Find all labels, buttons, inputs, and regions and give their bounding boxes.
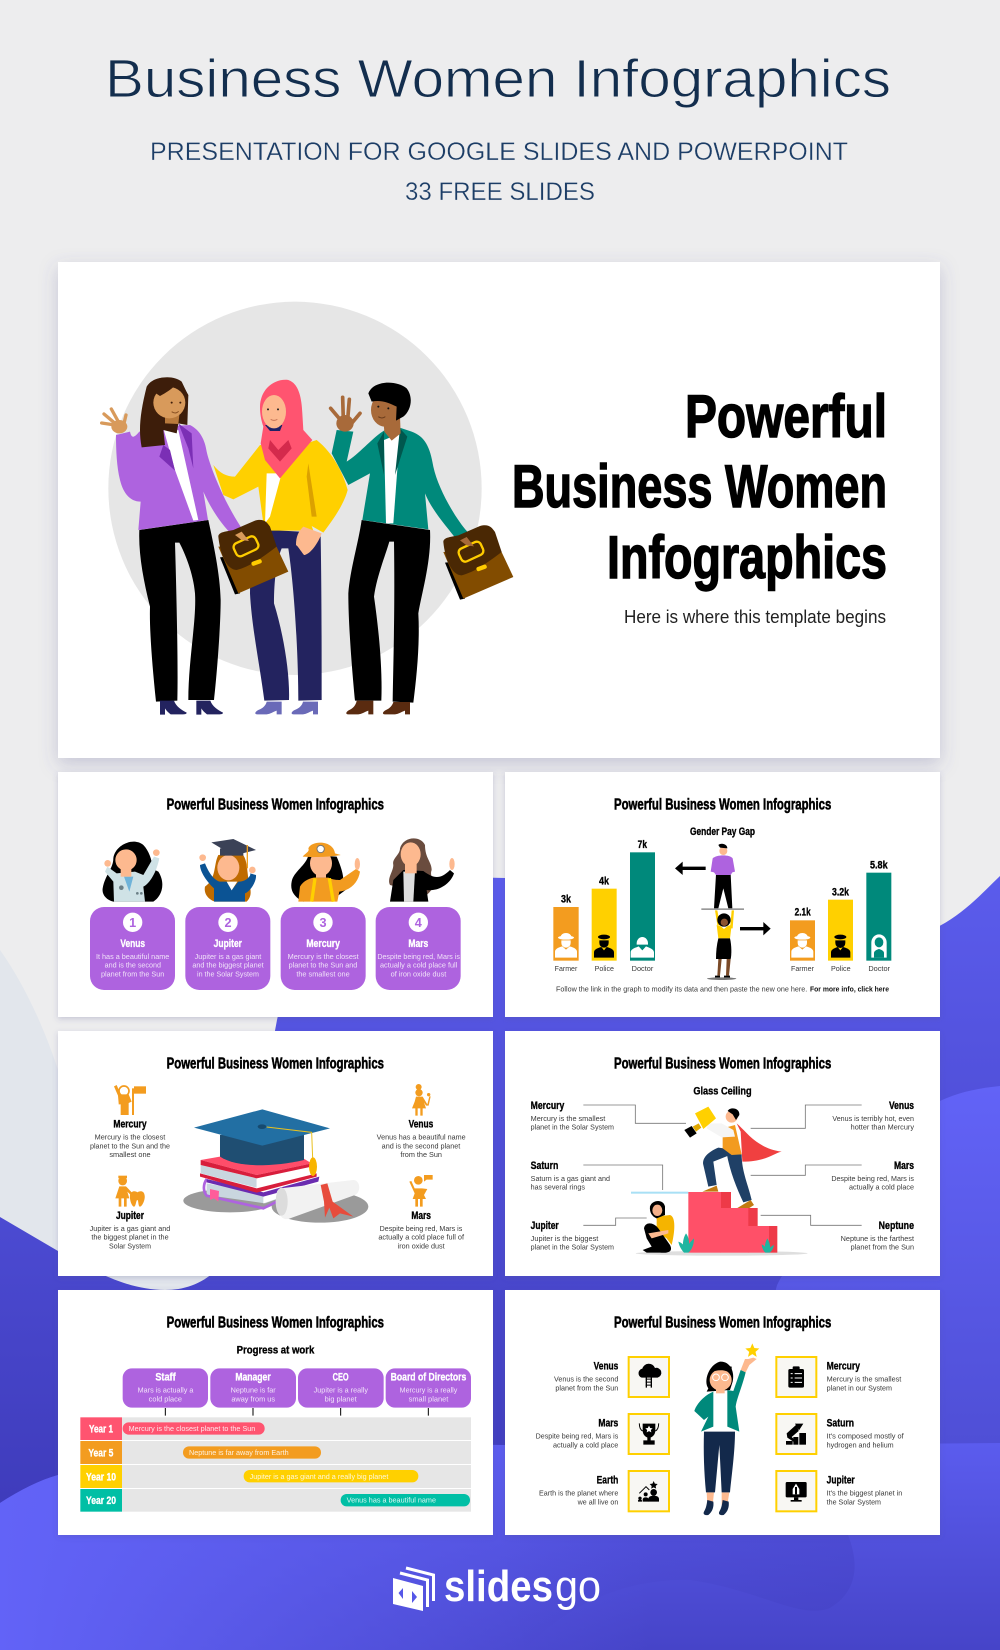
text: Jupiter	[90, 1210, 170, 1250]
text: Venus: Venus has a beautiful name	[377, 1135, 466, 1142]
card 1 Venus: and is the second	[105, 963, 161, 970]
bar chart: left (men): Police	[595, 966, 614, 973]
column: CEO: Jupiter is a really	[314, 1388, 369, 1395]
icon: astronaut woman with flag	[114, 1085, 146, 1115]
item: Jupiter: Jupiter	[827, 1474, 855, 1486]
bar chart: left (men): 3k	[561, 893, 572, 905]
icon: female farmer	[791, 933, 813, 958]
column: Staff: cold place	[149, 1396, 182, 1403]
bar chart: left (men)	[553, 839, 655, 973]
subheading: Progress at work	[237, 1344, 315, 1356]
column: Manager: Neptune is far	[231, 1388, 276, 1395]
column: Manager: away from us	[231, 1396, 276, 1403]
item: Mercury: Mercury	[827, 1360, 861, 1372]
panel: slide 2 gender pay gap	[505, 772, 940, 1017]
column: Staff	[123, 1368, 208, 1408]
text: Jupiter: planet in the Solar System	[531, 1245, 614, 1252]
text: Jupiter: Jupiter	[116, 1210, 145, 1222]
icon: monitor	[786, 1482, 807, 1502]
card 3 Mercury: Mercury	[306, 938, 341, 950]
bar chart: right (women): 5.8k	[870, 859, 888, 871]
text: Venus	[377, 1119, 466, 1159]
wordmark: go	[555, 1562, 601, 1611]
column: Board of Directors: small planet	[409, 1396, 448, 1403]
item: Mercury	[776, 1357, 901, 1397]
text: Mars: iron oxide dust	[398, 1243, 445, 1250]
icon: female doctor	[871, 934, 887, 958]
text: Venus	[832, 1100, 915, 1132]
text: Mercury: planet in the Solar System	[531, 1125, 614, 1132]
column: Board of Directors: Mercury is a really	[400, 1388, 458, 1395]
slide heading: Powerful Business Women Infographics	[167, 1314, 384, 1331]
bar chart: left (men): Doctor	[632, 966, 654, 973]
connector lines	[583, 1105, 862, 1225]
row: Year 20: Venus has a beautiful name	[347, 1498, 436, 1505]
bar chart: left (men): 4k	[599, 875, 610, 887]
item: Saturn: It's composed mostly of	[827, 1434, 904, 1441]
card 3 Mercury: the smallest one	[296, 971, 350, 978]
text: Mars: actually a cold place	[849, 1185, 914, 1192]
panel: hero slide	[58, 262, 940, 758]
woman in purple jacket	[102, 377, 241, 715]
column: Manager: Manager	[235, 1371, 271, 1383]
icon: stacked pages	[393, 1568, 434, 1611]
text: Neptune: Neptune	[879, 1220, 914, 1232]
text: Mercury: Mercury	[531, 1100, 565, 1112]
item: Saturn	[776, 1414, 904, 1454]
figure: woman below	[707, 910, 736, 980]
subtitle	[150, 138, 848, 206]
icon: female police	[831, 935, 850, 958]
icon: clipboard	[788, 1366, 804, 1388]
text: Jupiter: Jupiter	[531, 1220, 559, 1232]
icon: dentist woman with tooth	[115, 1176, 145, 1207]
figure: business woman	[389, 838, 455, 902]
text: Mars	[831, 1160, 915, 1192]
column: Manager	[210, 1368, 296, 1408]
icon: hand with steps	[786, 1424, 806, 1445]
card 1 Venus: 1	[129, 916, 136, 930]
card 1 Venus: It has a beautiful name	[96, 954, 169, 961]
row: Year 5: Neptune is far away from Earth	[189, 1450, 289, 1457]
card 2 Jupiter: Jupiter	[214, 938, 243, 950]
item: Jupiter: It's the biggest planet in	[827, 1491, 902, 1498]
row: Year 5	[80, 1441, 321, 1464]
illustration: graduation cap, books and diploma	[183, 1109, 368, 1223]
icon: speaking woman	[409, 1175, 433, 1207]
column: Board of Directors	[386, 1368, 471, 1408]
text: Mercury	[90, 1119, 170, 1159]
illustration: three business women	[102, 302, 513, 715]
card 2 Jupiter: in the Solar System	[197, 971, 259, 978]
row: Year 20	[80, 1489, 470, 1512]
item: Mars: Mars	[598, 1417, 618, 1429]
item: Jupiter	[776, 1471, 902, 1511]
slide heading: Powerful Business Women Infographics	[614, 1055, 831, 1072]
row: Year 10: Jupiter is a gas giant and a really big planet	[250, 1474, 388, 1481]
column ticks	[165, 1408, 428, 1416]
item: Venus: Venus	[594, 1360, 618, 1372]
hero heading: Infographics	[607, 524, 887, 591]
column: Staff: Mars is actually a	[138, 1388, 193, 1395]
text: Mercury: Mercury is the closest	[95, 1135, 165, 1142]
card 2 Jupiter: and the biggest planet	[192, 963, 264, 970]
arrow: right	[740, 922, 771, 935]
text: Venus: hotter than Mercury	[851, 1125, 915, 1132]
panel: slide 6 icons and woman reaching star	[505, 1290, 940, 1535]
hero heading: Powerful	[685, 383, 887, 450]
card 1 Venus: planet from the Sun	[101, 971, 164, 978]
bar chart: left (men): 7k	[638, 839, 648, 851]
bar chart: right (women)	[790, 859, 891, 973]
text: Jupiter: the biggest planet in the	[91, 1235, 169, 1242]
hero heading: Business Women	[512, 453, 887, 520]
panel: slide 3 graduation	[58, 1031, 493, 1276]
bar chart: left (men): Farmer	[555, 966, 578, 973]
figure: man on top	[711, 844, 735, 908]
subheading: Glass Ceiling	[693, 1085, 752, 1097]
column: CEO	[298, 1368, 384, 1408]
item: Mars	[536, 1414, 669, 1454]
illustration: sitting woman	[643, 1201, 674, 1253]
icon: police	[594, 935, 614, 958]
woman in yellow jacket and pink hijab	[213, 380, 348, 714]
logo: slidesgo	[393, 1562, 601, 1611]
text: Venus: from the Sun	[400, 1152, 442, 1159]
footnote: For more info, click here	[810, 987, 889, 994]
card 4 Mars	[376, 907, 461, 990]
text: Neptune: planet from the Sun	[851, 1245, 914, 1252]
background blobs	[0, 876, 1000, 1650]
text: Saturn: Saturn is a gas giant and	[531, 1176, 610, 1183]
bar chart: right (women): Police	[831, 966, 851, 973]
text: Saturn: Saturn	[531, 1160, 559, 1172]
text: Venus: Venus is terribly hot, even	[832, 1116, 914, 1123]
card 4 Mars: 4	[415, 916, 422, 930]
row: Year 1: Year 1	[89, 1423, 113, 1435]
text: Jupiter: Jupiter is a gas giant and	[90, 1226, 170, 1233]
card 2 Jupiter	[185, 907, 270, 990]
item: Earth	[539, 1471, 669, 1511]
text: Mercury: planet to the Sun and the	[90, 1143, 170, 1150]
row: Year 1: Mercury is the closest planet to the Sun	[129, 1426, 255, 1433]
text: Saturn	[531, 1160, 610, 1192]
figure: doctor	[103, 842, 162, 902]
bar chart: right (women): Farmer	[791, 966, 815, 973]
card 2 Jupiter: Jupiter is a gas giant	[195, 954, 261, 961]
balance beam	[701, 908, 744, 910]
item: Mercury: Mercury is the smallest	[827, 1377, 901, 1384]
subtitle: 33 FREE SLIDES	[405, 178, 595, 206]
card 4 Mars: Mars	[408, 938, 428, 950]
slide heading: Powerful Business Women Infographics	[167, 1055, 384, 1072]
glass ceiling line	[631, 1192, 688, 1194]
card 3 Mercury: Mercury is the closest	[288, 954, 359, 961]
item: Venus	[554, 1357, 669, 1397]
card 3 Mercury: 3	[319, 916, 327, 930]
card 4 Mars: Despite being red, Mars is	[377, 954, 461, 961]
subheading: Gender Pay Gap	[690, 826, 755, 838]
text: Mars	[378, 1210, 464, 1250]
briefcase 2	[443, 525, 513, 600]
title: Business Women Infographics	[105, 49, 891, 109]
text: Mercury	[531, 1100, 614, 1132]
row: Year 5: Year 5	[88, 1447, 113, 1459]
illustration: plants	[678, 1233, 774, 1253]
footnote: Follow the link in the graph to modify its data and then paste the new one here.	[556, 987, 807, 994]
item: Mars: actually a cold place	[553, 1442, 618, 1449]
item: Earth: we all live on	[577, 1499, 618, 1506]
text: Venus: Venus	[409, 1119, 433, 1131]
subtitle: PRESENTATION FOR GOOGLE SLIDES AND POWERPOINT	[150, 138, 848, 166]
item: Earth: Earth	[597, 1474, 619, 1486]
text: Jupiter: Solar System	[109, 1243, 151, 1250]
column: CEO: CEO	[333, 1371, 349, 1383]
item: Earth: Earth is the planet where	[539, 1491, 618, 1498]
slide heading: Powerful Business Women Infographics	[614, 1314, 831, 1331]
panel: slide 1 planets and women	[58, 772, 493, 1017]
text: Mercury: Mercury is the smallest	[531, 1116, 605, 1123]
row: Year 10: Year 10	[86, 1471, 116, 1483]
text: Mercury: Mercury	[113, 1119, 147, 1131]
card 1 Venus: Venus	[120, 938, 145, 950]
icon: doctor	[631, 937, 654, 958]
figure: construction worker	[291, 843, 360, 902]
card 3 Mercury: planet to the Sun and	[289, 963, 357, 970]
figure: graduate	[199, 839, 256, 902]
text: Mercury: smallest one	[109, 1152, 151, 1159]
row: Year 10	[80, 1465, 418, 1488]
card 3 Mercury	[281, 907, 366, 990]
text: Mars: Mars	[411, 1210, 431, 1222]
column: Board of Directors: Board of Directors	[391, 1371, 466, 1383]
card 2 Jupiter: 2	[224, 916, 232, 930]
bar chart: right (women): 2.1k	[795, 907, 811, 919]
hero heading	[512, 383, 887, 591]
icon: trophy	[639, 1423, 659, 1445]
row: Year 1	[80, 1417, 265, 1440]
arrow: left	[675, 862, 706, 875]
item: Saturn: Saturn	[827, 1417, 854, 1429]
panel: slide 4 glass ceiling	[505, 1031, 940, 1276]
timeline rows	[80, 1417, 471, 1512]
bar chart: right (women): 3.2k	[832, 886, 850, 898]
text: Jupiter: Jupiter is the biggest	[531, 1236, 598, 1243]
column: Staff: Staff	[155, 1371, 176, 1383]
item: Mars: Despite being red, Mars is	[536, 1434, 619, 1441]
icon: chef woman	[412, 1084, 431, 1116]
text: Mars: Despite being red, Mars is	[380, 1226, 463, 1233]
text: Saturn: has several rings	[531, 1185, 586, 1192]
briefcase 1	[218, 520, 288, 594]
item: Mercury: planet in our System	[827, 1385, 892, 1392]
panel: slide 5 progress at work	[58, 1290, 493, 1535]
icon: farmer	[555, 933, 577, 958]
text: Venus: Venus	[889, 1100, 914, 1112]
icon: cloud and ladder	[639, 1364, 661, 1388]
item: Venus: planet from the Sun	[555, 1385, 618, 1392]
text: Mars: actually a cold place full of	[378, 1235, 464, 1242]
slide heading: Powerful Business Women Infographics	[614, 796, 831, 813]
illustration: man with trophy and cape	[684, 1107, 782, 1208]
text: Mars: Mars	[894, 1160, 914, 1172]
icon: people and star	[638, 1481, 659, 1502]
hero tagline: Here is where this template begins	[624, 607, 886, 627]
column: CEO: big planet	[325, 1396, 357, 1403]
item: Venus: Venus is the second	[554, 1377, 618, 1384]
row: Year 20: Year 20	[86, 1495, 116, 1507]
text: Venus: and is the second planet	[382, 1143, 460, 1150]
illustration: stairs	[636, 1192, 808, 1256]
item: Saturn: hydrogen and helium	[827, 1442, 894, 1449]
text: Neptune: Neptune is the farthest	[841, 1236, 914, 1243]
slide heading: Powerful Business Women Infographics	[167, 796, 384, 813]
text: Mars: Despite being red, Mars is	[831, 1176, 915, 1183]
card 4 Mars: actually a cold place full	[380, 963, 458, 970]
bar chart: right (women): Doctor	[868, 966, 891, 973]
wordmark: slides	[444, 1562, 553, 1611]
card 4 Mars: of iron oxide dust	[391, 971, 446, 978]
illustration: woman reaching for star	[694, 1343, 759, 1515]
card 1 Venus	[90, 907, 175, 990]
text: Jupiter	[531, 1220, 614, 1252]
woman in teal jacket	[331, 383, 467, 714]
item: Jupiter: the Solar System	[827, 1499, 881, 1506]
text: Neptune	[841, 1220, 914, 1252]
